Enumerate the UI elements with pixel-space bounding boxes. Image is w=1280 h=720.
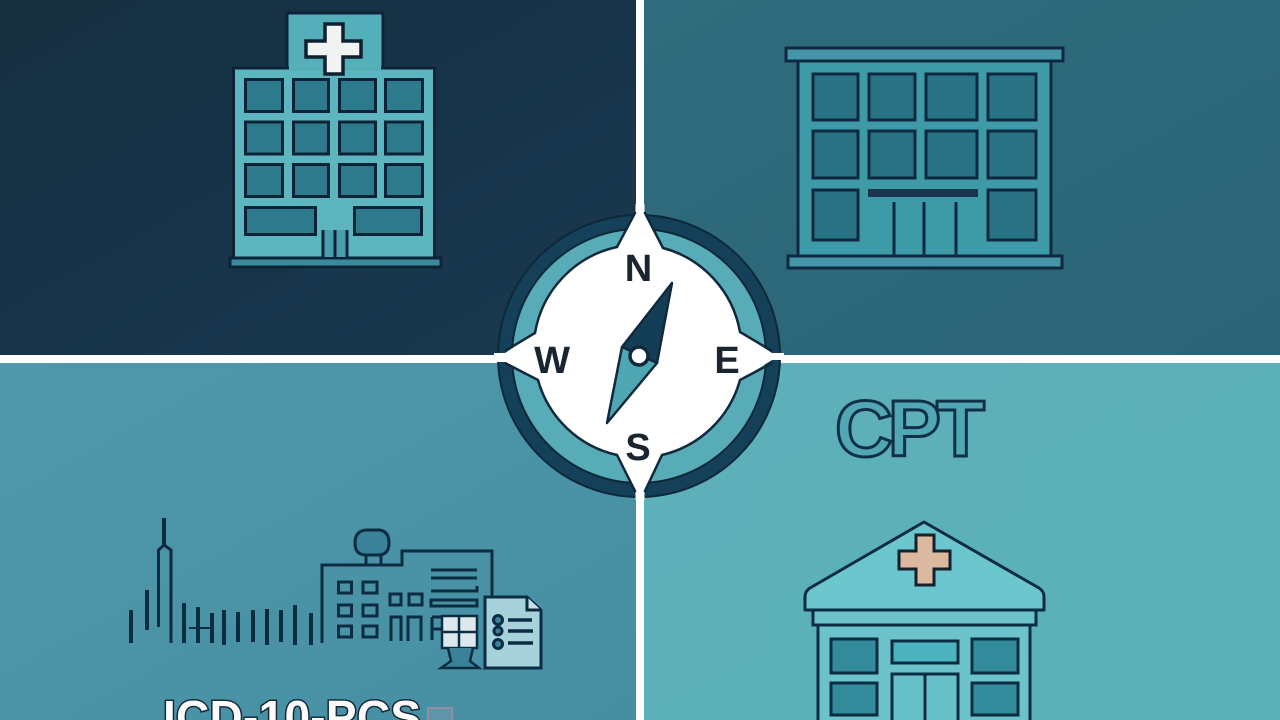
document icon	[485, 597, 541, 668]
computer icon	[441, 616, 479, 668]
panel: top-right background	[644, 0, 1280, 355]
skyline bars	[131, 518, 311, 645]
icon: skyline, hospital complex and document	[131, 518, 541, 668]
compass white face and star points	[494, 204, 784, 500]
hospital complex outline	[322, 551, 492, 643]
panel: bottom-right background	[644, 363, 1280, 720]
compass letter N: N	[625, 248, 652, 290]
icon: peach cross	[899, 535, 950, 585]
compass letter E: E	[714, 340, 740, 382]
dome	[355, 530, 389, 565]
compass letter W: W	[534, 340, 570, 382]
icon: office building	[786, 48, 1063, 268]
complex windows	[338, 570, 477, 641]
icon: clinic building with cross	[805, 522, 1044, 720]
compass	[494, 204, 784, 500]
heading: CPT: CPT	[835, 384, 985, 473]
icon: white cross on hospital	[306, 24, 361, 74]
compass needle	[607, 283, 672, 423]
compass outer ring	[511, 228, 767, 484]
pink marker	[428, 708, 452, 720]
icon: hospital tower with cross	[230, 13, 441, 267]
panel: bottom-left background	[0, 363, 636, 720]
panel: top-left background	[0, 0, 636, 355]
compass letter S: S	[625, 427, 651, 469]
